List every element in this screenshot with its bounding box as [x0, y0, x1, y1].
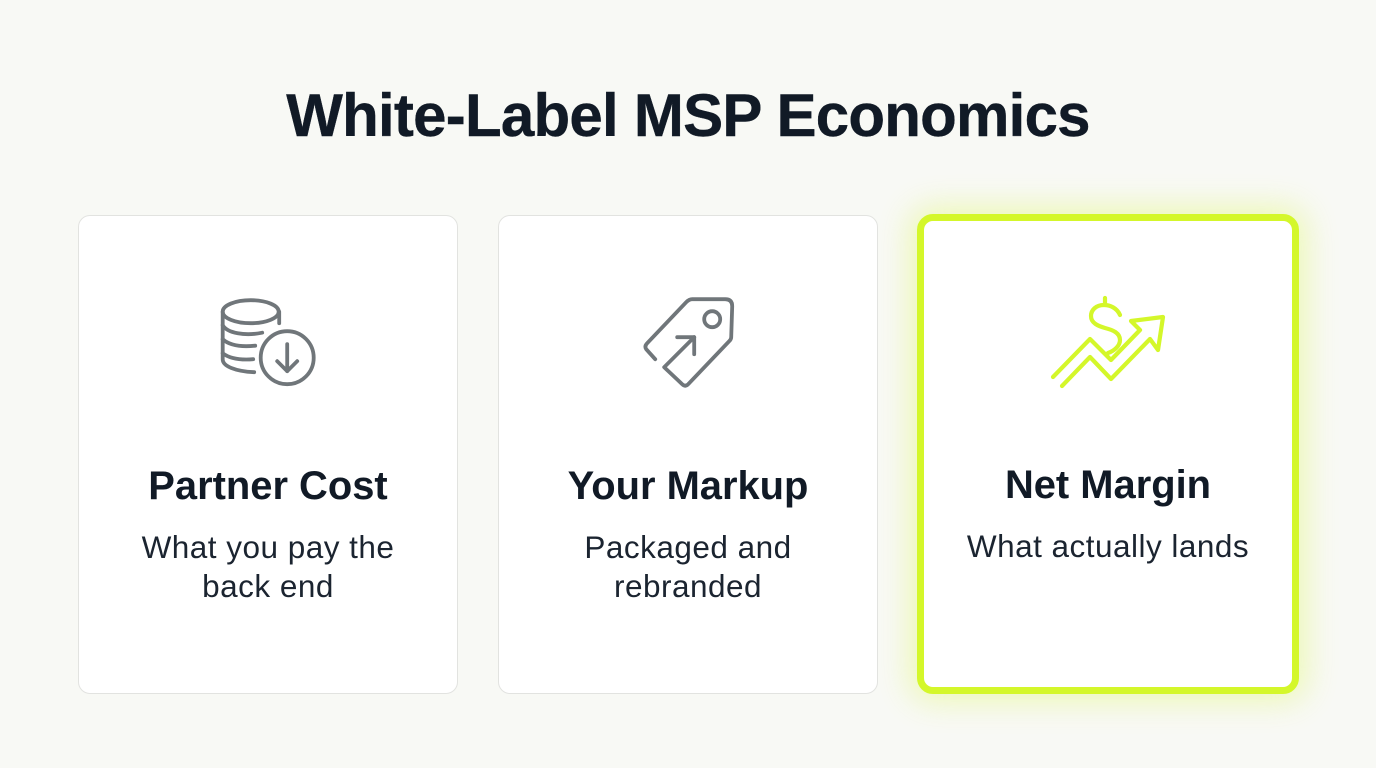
heading: Net Margin — [1005, 463, 1211, 507]
description — [584, 529, 792, 604]
description: What you pay the — [142, 529, 394, 565]
panel: net margin (highlighted) — [917, 214, 1299, 694]
icon: dollar and rising arrow — [1050, 296, 1166, 388]
description — [142, 529, 394, 604]
icon: price tag with up arrow — [643, 297, 734, 388]
panel: partner cost — [78, 215, 458, 694]
heading: Your Markup — [568, 464, 808, 508]
description: What actually lands — [967, 528, 1249, 564]
description: back end — [202, 568, 334, 604]
panel: your markup — [498, 215, 878, 694]
icon: coin stack with down arrow — [220, 298, 316, 386]
heading: Partner Cost — [148, 464, 388, 508]
title: White-Label MSP Economics — [286, 82, 1090, 149]
description: rebranded — [614, 568, 762, 604]
description: Packaged and — [584, 529, 792, 565]
